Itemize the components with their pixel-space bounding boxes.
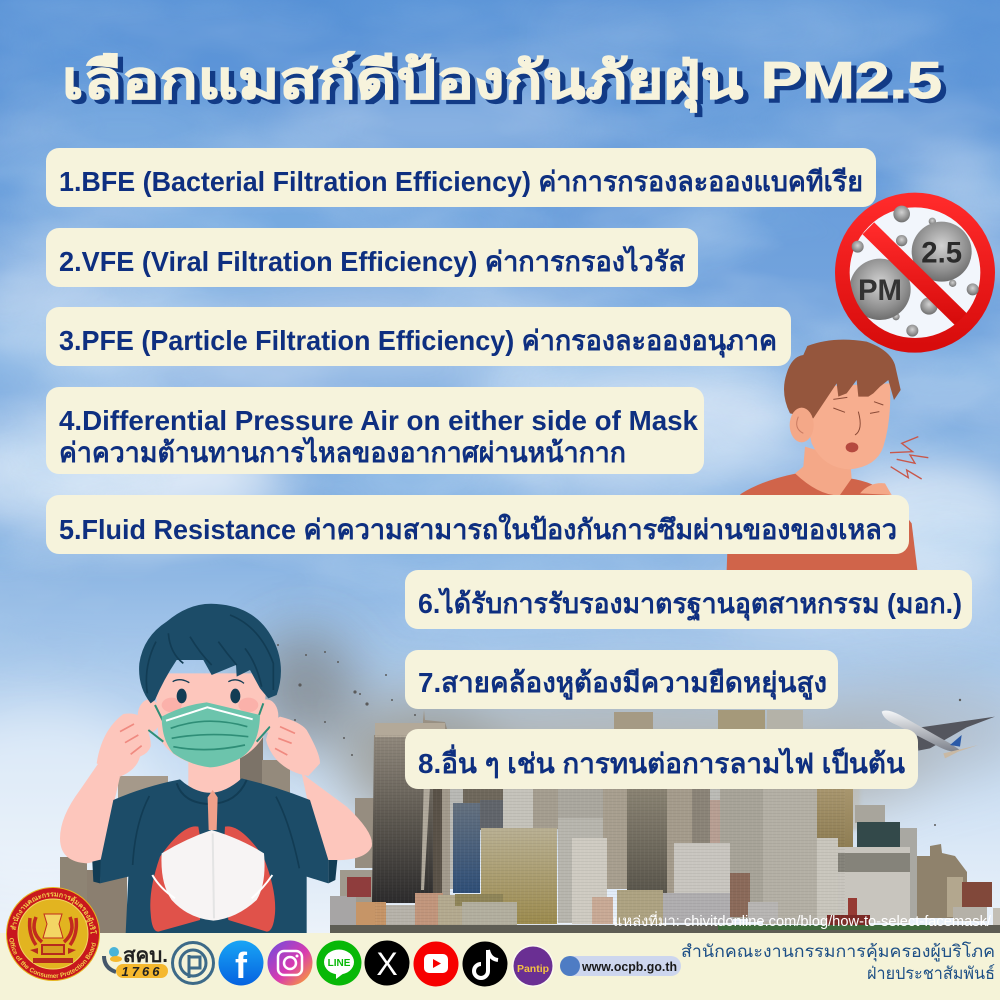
dust particles [277, 644, 961, 826]
pill 1 [46, 148, 876, 207]
icon: no PM2.5 sign: 2.5 [921, 237, 962, 270]
pill 4 [46, 387, 704, 474]
pill 5: 5.Fluid Resistance ค่าความสามารถในป้องกันการซึมผ่านของของเหลว [59, 513, 897, 545]
title: เลือกแมสก์ดีป้องกันภัยฝุ่น PM2.5 [62, 51, 942, 113]
illustration: boy with mask and lungs [60, 604, 372, 933]
pill 6: 6.ได้รับการรับรองมาตรฐานอุตสาหกรรม (มอก.) [418, 587, 962, 622]
agency name: สำนักคณะงานกรรมการคุ้มครองผู้บริโภค [681, 941, 995, 962]
logo: hotline 1766 [104, 945, 168, 979]
icon: Facebook: f [235, 945, 248, 986]
pill 7 [405, 650, 838, 709]
icon: TikTok [462, 942, 508, 986]
icon: LINE: LINE [328, 958, 351, 969]
pill 6 [405, 570, 972, 629]
icon: X [364, 940, 410, 986]
source credit: แหล่งที่มา: chivitdonline.com/blog/how-to-select-facemask/ [613, 911, 992, 930]
pill 7: 7.สายคล้องหูต้องมีความยืดหยุ่นสูง [418, 667, 827, 700]
illustration: coughing boy [727, 340, 928, 570]
pill 3 [46, 307, 791, 366]
airplane [882, 711, 995, 758]
logo: Pantip [512, 945, 554, 987]
icon: no PM2.5 sign: PM [858, 274, 902, 307]
logo: Office of the Consumer Protection Board seal [6, 275, 100, 981]
logo: hotline 1766: สคบ. [123, 945, 168, 967]
pill 8: 8.อื่น ๆ เช่น การทนต่อการลามไฟ เป็นต้น [418, 744, 905, 779]
icon: Facebook [218, 940, 264, 986]
website badge: www.ocpb.go.th [581, 960, 677, 974]
pill 8 [405, 729, 918, 789]
city skyline [60, 710, 1000, 933]
website badge [560, 956, 681, 976]
logo: Office of the Consumer Protection Board seal: สำนักงานคณะกรรมการคุ้มครองผู้บริโภค [10, 892, 97, 934]
icon: Instagram [268, 940, 312, 986]
pill 1: 1.BFE (Bacterial Filtration Efficiency) ค่าการกรองละอองแบคทีเรีย [59, 166, 863, 197]
icon: no PM2.5 sign [842, 200, 988, 345]
logo: hotline 1766: 1766 [122, 964, 162, 979]
pill 3: 3.PFE (Particle Filtration Efficiency) ค่ากรองละอองอนุภาค [59, 325, 777, 358]
pill 5 [46, 495, 909, 554]
agency name: ฝ่ายประชาสัมพันธ์ [867, 964, 995, 983]
footer band [0, 933, 1000, 1000]
agency name [681, 941, 995, 983]
icon: YouTube [414, 942, 458, 986]
logo: OCPB circle [172, 942, 214, 984]
pill 4: 4.Differential Pressure Air on either side of Mask [59, 405, 699, 436]
title: เลือกแมสก์ดีป้องกันภัยฝุ่น PM2.5 [67, 55, 947, 117]
smog haze [250, 630, 1000, 830]
icon: X: X [376, 946, 398, 982]
pill 2: 2.VFE (Viral Filtration Efficiency) ค่าการกรองไวรัส [59, 245, 685, 277]
icon: LINE [316, 940, 362, 986]
logo: Pantip: Pantip [517, 963, 549, 975]
logo: Office of the Consumer Protection Board seal: Office of the Consumer Protection Board [9, 938, 96, 978]
pill 2 [46, 228, 698, 287]
pill 4: ค่าความต้านทานการไหลของอากาศผ่านหน้ากาก [59, 436, 626, 468]
